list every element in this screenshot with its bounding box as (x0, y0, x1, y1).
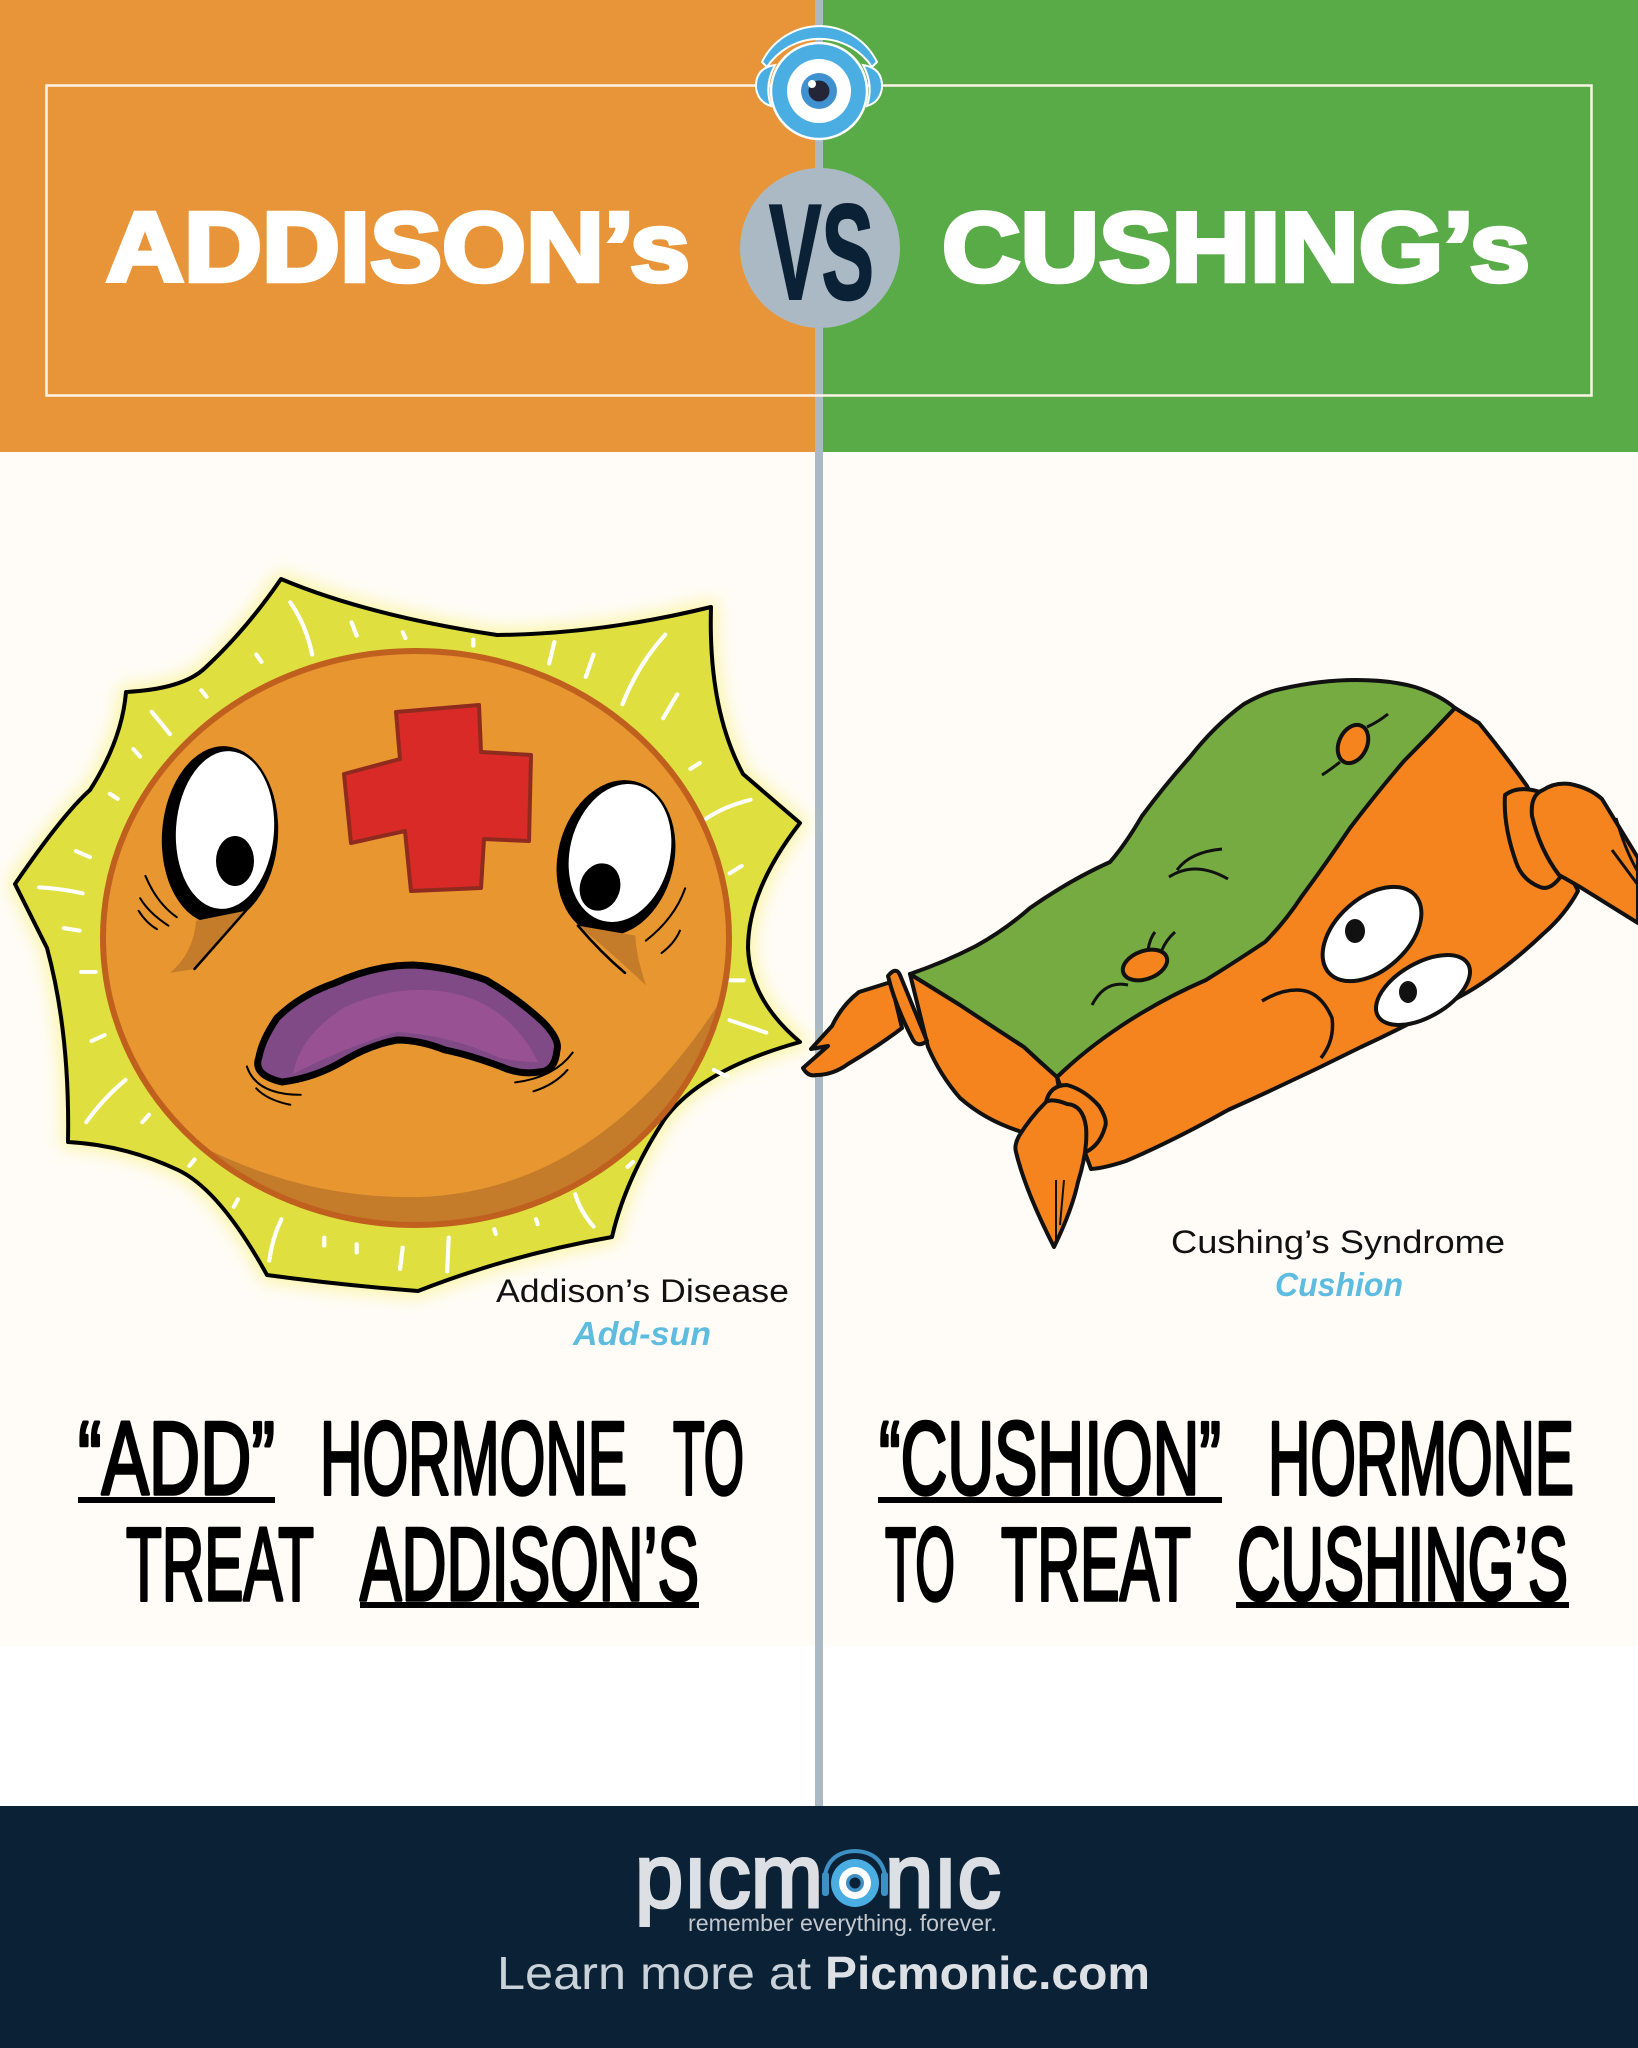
footer link: Picmonic.com (825, 1947, 1150, 1999)
right tie band (1505, 789, 1565, 888)
icon: eye logo with headphones (756, 26, 882, 139)
footer logo: pıcm (635, 1827, 823, 1927)
statement: Cushing's: TREAT (1001, 1507, 1191, 1623)
cushion left side (910, 974, 1070, 1150)
red cross (344, 705, 531, 891)
statement: Cushing's: TO (885, 1507, 955, 1623)
cushion front (1057, 708, 1578, 1169)
cushion dimples (1092, 714, 1388, 1005)
footer band (0, 1806, 1638, 2048)
cushion eyes (1305, 868, 1482, 1039)
caption: Addison's Disease: Add-sun (572, 1315, 711, 1352)
left eye (156, 742, 284, 928)
footer logo: nıc (885, 1827, 1001, 1927)
footer link: Learn more at (497, 1947, 811, 1999)
illustration: Cushing's cushion (803, 680, 1638, 1247)
cushion green top (910, 680, 1455, 1077)
caption: Cushing's Syndrome (1171, 1224, 1505, 1303)
mouth (258, 965, 557, 1082)
statement: Addison's: TREAT (126, 1507, 314, 1623)
statement: Cushing's: “CUSHION” (879, 1401, 1221, 1517)
footer link (497, 1947, 1150, 1999)
vs badge (740, 168, 900, 328)
illustration: Addison's sun (15, 579, 800, 1291)
right arm (1532, 784, 1638, 923)
statement: Addison's: “ADD” (78, 1401, 275, 1517)
statement: Cushing's (878, 1401, 1574, 1623)
caption: Addison's Disease (496, 1273, 789, 1352)
caption: Cushing's Syndrome: Cushion (1275, 1266, 1403, 1303)
title: Addison's: ADDISON’s (106, 192, 690, 302)
under-eye shading and wrinkles (139, 876, 685, 1105)
header band (0, 0, 1638, 452)
text: TO (673, 1401, 744, 1517)
bottom tie (1046, 1085, 1106, 1152)
sun face disc (103, 651, 760, 1260)
sun rays (39, 602, 766, 1271)
statement: Addison's: HORMONE (320, 1401, 627, 1517)
statement: Addison's: ADDISON’S (360, 1507, 699, 1623)
vs badge: VS (769, 176, 874, 328)
caption: Addison's Disease: Addison’s Disease (496, 1273, 789, 1309)
cushion nose line (1262, 990, 1333, 1058)
footer logo (635, 1827, 1001, 1936)
statement: Addison's (78, 1401, 744, 1623)
right eye (541, 767, 691, 949)
left arm (803, 982, 902, 1075)
center divider (815, 0, 823, 1806)
caption: Cushing's Syndrome: Cushing’s Syndrome (1171, 1224, 1505, 1260)
footer logo: remember everything. forever. (688, 1910, 997, 1936)
header frame (46, 86, 1592, 396)
title: Cushing's: CUSHING’s (942, 192, 1530, 302)
